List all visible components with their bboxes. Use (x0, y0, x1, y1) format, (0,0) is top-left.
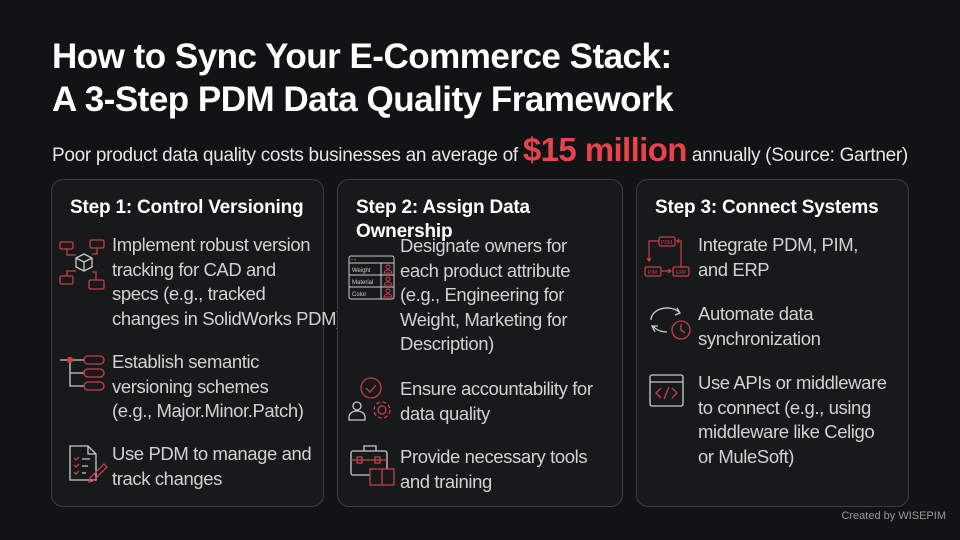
text: version tracking: tracking for CAD and (112, 258, 276, 280)
icon: attribute owners table: Material (352, 280, 373, 286)
text: use PDM: Use PDM to manage and (112, 443, 311, 464)
icon: PDM PIM ERP cycle (644, 236, 690, 277)
title: A 3-Step PDM Data Quality Framework (52, 80, 673, 119)
text: designate owners: each product attribute (400, 260, 570, 280)
text: use PDM: track changes (112, 468, 222, 488)
text: designate owners: (e.g., Engineering for (400, 284, 564, 305)
text: automate (698, 303, 821, 349)
text: integrate (698, 234, 858, 280)
panel: step 1 (51, 179, 324, 507)
text: tools and training: and training (400, 470, 492, 492)
icon: PDM PIM ERP cycle: PDM (661, 240, 672, 246)
panel: step 3 (636, 179, 909, 507)
text: automate: synchronization (698, 328, 821, 348)
footer credit: Created by WISEPIM (841, 510, 946, 522)
title: How to Sync Your E-Commerce Stack: (52, 37, 672, 76)
text: semantic versioning: (e.g., Major.Minor.Patch) (112, 400, 304, 421)
text: automate: Automate data (698, 303, 813, 324)
icon: person gear check (348, 377, 391, 421)
text: version tracking: specs (e.g., tracked (112, 283, 265, 304)
text: APIs middleware: or MuleSoft) (698, 446, 794, 466)
text: designate owners: Designate owners for (400, 235, 567, 256)
heading: step 2 (356, 197, 530, 242)
icon: attribute owners table: Weight (352, 268, 371, 274)
text: accountability: Ensure accountability for (400, 378, 593, 399)
text: semantic versioning: Establish semantic (112, 351, 259, 372)
icon: semantic tree (60, 355, 105, 391)
heading: step 2: Step 2: Assign Data (356, 197, 530, 218)
text: tools and training (400, 446, 587, 492)
icon: attribute owners table (348, 256, 394, 300)
title (52, 37, 674, 119)
subtitle: Poor product data quality costs businesses an average of $15 million annually (Source: Gartner) (52, 131, 908, 168)
text: APIs middleware: middleware like Celigo (698, 421, 874, 442)
heading: step 2: Ownership (356, 221, 452, 242)
icon: checklist pencil (69, 445, 108, 483)
icon: PDM PIM ERP cycle: PIM (648, 270, 657, 276)
text: APIs middleware: to connect (e.g., using (698, 396, 871, 418)
text: APIs middleware (698, 372, 887, 467)
icon: PDM PIM ERP cycle: ERP (676, 270, 687, 276)
text: designate owners (400, 235, 570, 354)
text: accountability: data quality (400, 402, 490, 424)
heading: step 1: Step 1: Control Versioning (70, 197, 303, 218)
heading: step 3: Step 3: Connect Systems (655, 197, 878, 218)
text: accountability (400, 378, 593, 424)
icon: code window (649, 374, 684, 407)
text: APIs middleware: Use APIs or middleware (698, 372, 887, 393)
panel: step 2 (337, 179, 623, 507)
text: use PDM (112, 443, 311, 489)
text: semantic versioning: versioning schemes (112, 376, 268, 396)
text: version tracking: changes in SolidWorks PDM) (112, 308, 342, 328)
text: integrate: Integrate PDM, PIM, (698, 234, 858, 255)
text: designate owners: Description) (400, 333, 494, 354)
text: integrate: and ERP (698, 258, 769, 280)
icon: sync clock (650, 307, 691, 340)
text: semantic versioning (112, 351, 304, 421)
icon: toolbox book (350, 445, 395, 486)
text: version tracking (112, 234, 342, 329)
text: tools and training: Provide necessary tools (400, 446, 587, 467)
icon: versioned box (59, 239, 105, 290)
text: version tracking: Implement robust version (112, 234, 310, 255)
text: designate owners: Weight, Marketing for (400, 308, 567, 330)
icon: attribute owners table: Color (352, 292, 366, 298)
